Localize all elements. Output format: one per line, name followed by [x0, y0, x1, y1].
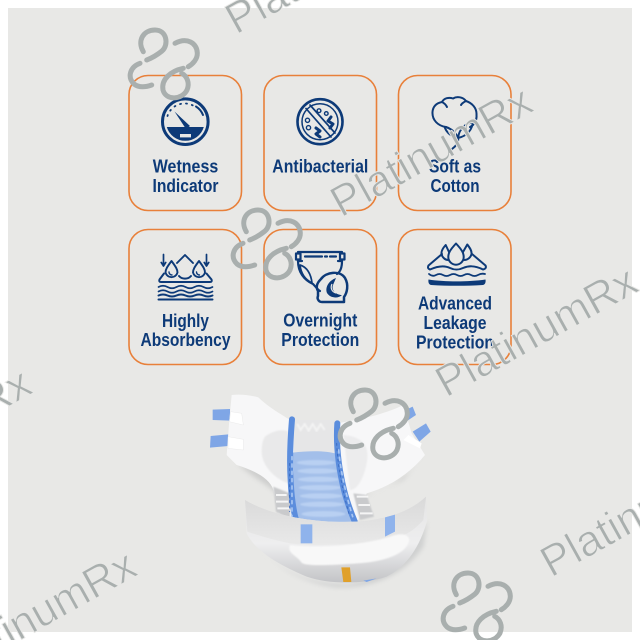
icon: cotton boll [432, 97, 477, 149]
label: wetness indicator: Indicator [152, 176, 218, 196]
icon: absorbing drops [158, 254, 212, 300]
left tapes [210, 409, 230, 448]
label: soft as cotton: Cotton [430, 176, 480, 196]
centre sheet [293, 420, 337, 455]
back wings [227, 395, 425, 520]
card: wetness indicator [129, 76, 242, 210]
card: highly absorbency [129, 230, 242, 364]
watermark: logo 1 [130, 30, 197, 98]
label: antibacterial: Antibacterial [272, 156, 368, 176]
product photo: open diaper [210, 395, 431, 587]
watermark: text centre: PlatinumRx [323, 77, 541, 227]
card: advanced leakage protection [398, 230, 511, 364]
label: overnight protection: Overnight [283, 310, 357, 330]
icon: leak-proof pad with drops [428, 244, 486, 286]
watermark: logo 3 [340, 390, 407, 458]
icon: wetness gauge [162, 99, 208, 144]
label: advanced leakage protection: Advanced [418, 294, 492, 314]
icon: diaper with moon [296, 252, 347, 302]
watermark: logo 2 [233, 210, 300, 278]
label: wetness indicator [152, 156, 218, 196]
label: soft as cotton: Soft as [429, 156, 481, 176]
icon: crossed bacteria [298, 99, 342, 144]
card: soft as cotton [398, 76, 511, 210]
label: highly absorbency: Absorbency [140, 330, 230, 350]
label: soft as cotton [429, 156, 481, 196]
label: advanced leakage protection: Leakage [424, 313, 486, 333]
label: wetness indicator: Wetness [153, 156, 218, 176]
label: advanced leakage protection: Protection [416, 332, 494, 352]
front panel [245, 497, 427, 583]
right tapes [402, 407, 431, 442]
card: overnight protection [264, 230, 376, 364]
label: overnight protection: Protection [281, 330, 359, 350]
label: advanced leakage protection [416, 294, 494, 352]
label: overnight protection [281, 310, 359, 350]
watermark: logo 4 [443, 573, 510, 640]
absorbent core [293, 451, 354, 523]
watermark: text lower centre: PlatinumRx [428, 257, 640, 407]
blue leak guards [290, 419, 355, 521]
label: highly absorbency [140, 311, 230, 350]
card: antibacterial [264, 76, 376, 210]
label: highly absorbency: Highly [162, 311, 209, 331]
